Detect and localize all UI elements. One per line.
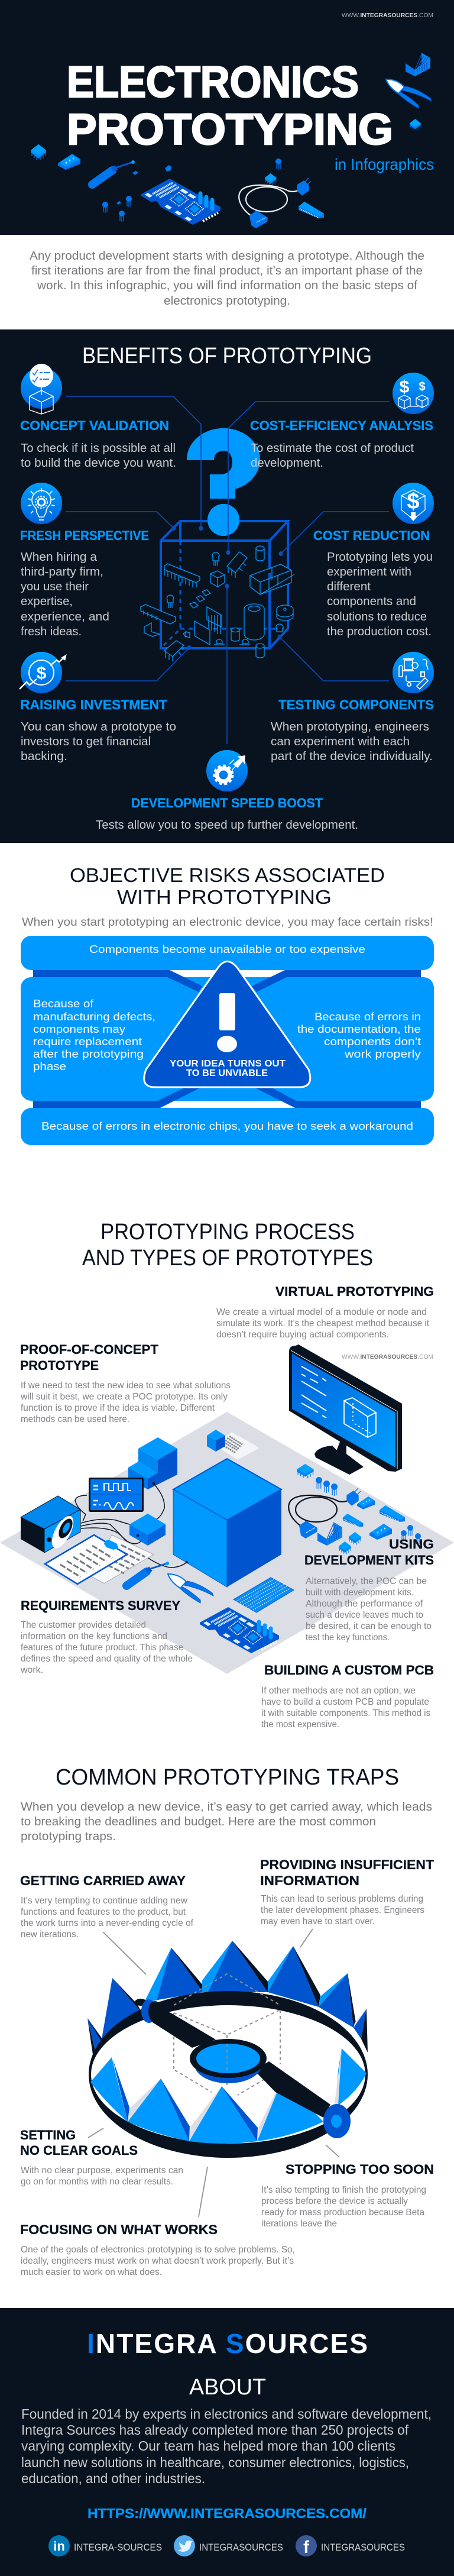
type: using development kits: test the key functions.: [306, 1633, 390, 1643]
text: fresh perspective: you use their: [21, 580, 89, 593]
type: using development kits: DEVELOPMENT KITS: [304, 1553, 434, 1567]
trap: stopping too soon: process before the device is actually: [261, 2196, 408, 2206]
type: requirements survey: [20, 1598, 193, 1675]
text: concept validation: To check if it is possible at all: [21, 442, 176, 455]
trap: getting carried away: GETTING CARRIED AWAY: [20, 1873, 186, 1888]
text: cost-efficiency analysis: development.: [251, 457, 323, 470]
social: linkedin: INTEGRA-SOURCES: [74, 2542, 162, 2553]
website link: HTTPS://WWW.INTEGRASOURCES.COM/: [87, 2506, 367, 2521]
type: proof-of-concept prototype: PROTOTYPE: [20, 1358, 99, 1373]
text: fresh perspective: fresh ideas.: [21, 625, 82, 638]
type: using development kits: Alternatively, the POC can be: [306, 1576, 427, 1586]
website label: WWW.INTEGRASOURCES.COM: [342, 12, 433, 19]
benefit: raising investment: [20, 652, 176, 763]
risk: manufacturing defects: manufacturing defects,: [33, 1011, 155, 1023]
text: fresh perspective: expertise,: [21, 595, 73, 608]
type: building a custom pcb: have to build a custom PCB and populate: [261, 1697, 429, 1707]
illustration: central cube: [173, 1459, 281, 1587]
about text: Integra Sources has already completed more than 250 projects of: [21, 2422, 409, 2438]
risk: documentation: work properly: [344, 1048, 421, 1060]
back spikes: [87, 1941, 368, 2058]
trap: stopping too soon: iterations leave the: [261, 2219, 337, 2229]
front spikes: [90, 2048, 367, 2144]
illustration: bear trap: [87, 1941, 368, 2158]
trap: providing insufficient information: [260, 1857, 434, 1927]
text: fresh perspective: When hiring a: [21, 551, 98, 564]
type: proof-of-concept prototype: methods can be used here.: [21, 1414, 129, 1424]
trap: getting carried away: the work turns into a never-ending cycle of: [21, 1918, 194, 1928]
text: testing components: [271, 720, 433, 763]
risk: manufacturing defects: phase: [33, 1061, 66, 1072]
panel: footer: [0, 2308, 454, 2576]
type: requirements survey: REQUIREMENTS SURVEY: [21, 1598, 180, 1613]
social: linkedin: [48, 2535, 162, 2556]
illustration: development kit components: [288, 1464, 421, 1554]
risk: manufacturing defects: [33, 998, 155, 1072]
trap: stopping too soon: ready for mass production because Beta: [261, 2207, 424, 2218]
icon: cost reduction: [393, 483, 434, 524]
type: using development kits: be desired, it can be enough to: [306, 1621, 432, 1631]
text: cost reduction: experiment with: [327, 565, 411, 578]
risk: manufacturing defects: require replacement: [33, 1036, 142, 1048]
intro text: first iterations are far from the final product, it’s an important phase of the: [31, 264, 423, 277]
type: building a custom pcb: it with suitable components. This method is: [261, 1708, 430, 1718]
heading: process: [82, 1220, 373, 1271]
trap: focusing on what works: One of the goals of electronics prototyping is to solve problems. So,: [21, 2245, 295, 2255]
type: using development kits: USING: [389, 1537, 434, 1552]
text: testing components: can experiment with each: [271, 735, 410, 748]
type: building a custom pcb: If other methods are not an option, we: [261, 1686, 416, 1696]
text: raising investment: [21, 720, 176, 763]
illustration: pliers: [168, 1574, 213, 1603]
title: PROTOTYPING: [67, 105, 393, 154]
trap: providing insufficient information: may even have to start over.: [261, 1916, 375, 1927]
about text: Founded in 2014 by experts in electronics and software development,: [21, 2406, 432, 2422]
icon: screwdriver: [92, 160, 135, 185]
traps intro: prototyping traps.: [21, 1830, 116, 1843]
icon: transistors: [102, 159, 281, 222]
icon: speed boost: [206, 750, 248, 791]
icon: cost-efficiency: $: [400, 377, 410, 397]
text: cost reduction: different: [327, 580, 371, 593]
trap: stopping too soon: It’s also tempting to finish the prototyping: [261, 2185, 426, 2195]
social: facebook: f: [303, 2538, 310, 2557]
icon: long chip: [299, 202, 324, 218]
title: ELECTRONICS: [67, 57, 359, 106]
box outline: [161, 521, 288, 648]
warning text: [170, 1059, 286, 1078]
type: proof-of-concept prototype: If we need to test the new idea to see what solutions: [21, 1381, 231, 1391]
question mark: [187, 428, 260, 536]
social: twitter: [174, 2535, 283, 2556]
icon: cost-efficiency: $: [419, 380, 426, 393]
trap: stopping too soon: [261, 2162, 434, 2229]
traps intro: When you develop a new device, it’s easy to get carried away, which leads: [21, 1801, 432, 1814]
connector dots: [171, 526, 283, 650]
connector lines: [66, 396, 389, 744]
risk: manufacturing defects: after the prototyping: [33, 1048, 144, 1060]
trap: providing insufficient information: PROVIDING INSUFFICIENT: [260, 1857, 434, 1872]
heading: risks: WITH PROTOTYPING: [117, 886, 332, 908]
type: proof-of-concept prototype: will suit it best, we create a POC prototype. Its only: [20, 1392, 228, 1402]
icon: raising investment: $: [37, 664, 47, 683]
heading: process: AND TYPES OF PROTOTYPES: [82, 1246, 373, 1271]
text: raising investment: backing.: [21, 750, 67, 763]
social: twitter: INTEGRASOURCES: [199, 2542, 283, 2553]
floor diamond: [0, 1412, 454, 1674]
heading: risks: OBJECTIVE RISKS ASSOCIATED: [70, 864, 385, 886]
about text: education, and other industries.: [21, 2471, 205, 2486]
trap: setting no clear goals: With no clear purpose, experiments can: [21, 2165, 183, 2176]
type: virtual prototyping: simulate its work. It’s the cheapest method because it: [216, 1318, 430, 1329]
type: requirements survey: defines the speed and quality of the whole: [21, 1654, 193, 1664]
trap: focusing on what works: much easier to work on what does.: [21, 2267, 162, 2277]
icon: raising investment: [20, 652, 66, 693]
trap: setting no clear goals: go on for months with no clear results.: [21, 2177, 173, 2187]
text: cost reduction: the production cost.: [327, 625, 432, 638]
icon: small chip left: [31, 144, 46, 160]
pivots: [135, 1999, 351, 2138]
logo: INTEGRA SOURCES: [87, 2328, 368, 2359]
risk: components: Components become unavailable or too expensive: [89, 943, 365, 955]
text: concept validation: to build the device you want.: [21, 457, 176, 470]
risk: documentation: the documentation, the: [297, 1023, 421, 1035]
text: testing components: When prototyping, engineers: [271, 720, 429, 733]
leader lines: [88, 1929, 339, 2217]
icon: relay: [58, 154, 80, 170]
trap: stopping too soon: STOPPING TOO SOON: [286, 2162, 434, 2177]
illustration: cable: [239, 178, 311, 228]
icon: heat sink: [406, 53, 430, 76]
illustration: monitor: [289, 1344, 433, 1475]
icon: cost reduction: $: [407, 489, 420, 514]
type: virtual prototyping: doesn’t require buying actual components.: [216, 1330, 389, 1340]
heading: testing components: TESTING COMPONENTS: [278, 697, 434, 712]
text: concept validation: [21, 442, 176, 470]
title: [67, 57, 393, 154]
heading: concept validation: CONCEPT VALIDATION: [20, 418, 169, 433]
panel: header: [0, 0, 454, 235]
text: raising investment: investors to get financial: [21, 735, 151, 748]
illustration: stacked blocks: [128, 1437, 177, 1489]
benefit: cost-efficiency analysis: [250, 373, 434, 470]
heading: about: ABOUT: [189, 2375, 266, 2400]
panel: benefits: [0, 329, 454, 843]
trap: providing insufficient information: INFORMATION: [260, 1873, 359, 1888]
dashed guides: [174, 1974, 280, 2095]
trap: getting carried away: [20, 1873, 194, 1940]
intro text: electronics prototyping.: [164, 295, 290, 308]
trap: focusing on what works: ideally, engineers must work on what doesn’t work properly. But it’s: [21, 2256, 294, 2266]
benefit: development speed boost: [96, 750, 358, 832]
type: using development kits: Although the performance of: [306, 1599, 423, 1609]
type: building a custom pcb: [261, 1663, 434, 1730]
risk: manufacturing defects: Because of: [33, 998, 94, 1010]
text: fresh perspective: third-party firm,: [21, 565, 103, 578]
icon: cost-efficiency: [393, 373, 434, 414]
heading: risks: [70, 864, 385, 908]
text: raising investment: You can show a prototype to: [21, 720, 176, 733]
risk cards: [21, 936, 434, 1145]
text: cost reduction: Prototyping lets you: [327, 551, 433, 564]
trap: setting no clear goals: SETTING: [20, 2128, 76, 2142]
heading: benefits: BENEFITS OF PROTOTYPING: [82, 344, 372, 369]
type: using development kits: [304, 1537, 434, 1643]
text: development speed boost: Tests allow you to speed up further development.: [96, 819, 358, 832]
icon: small chip right: [410, 119, 421, 130]
type: virtual prototyping: [216, 1284, 434, 1340]
illustration: oscilloscope: [89, 1478, 144, 1512]
about text: [21, 2406, 432, 2486]
trap: setting no clear goals: NO CLEAR GOALS: [20, 2143, 138, 2158]
type: virtual prototyping: We create a virtual model of a module or node and: [216, 1307, 427, 1317]
text: cost reduction: [327, 551, 433, 638]
text: cost reduction: components and: [327, 595, 416, 608]
risk: electronic chips: Because of errors in electronic chips, you have to seek a workaround: [41, 1120, 413, 1132]
benefit: cost reduction: [313, 483, 434, 638]
type: using development kits: such a device leaves much to: [306, 1610, 423, 1620]
trap: focusing on what works: [20, 2222, 295, 2277]
traps intro: to breaking the deadlines and budget. Here are the most common: [21, 1815, 376, 1828]
social: facebook: INTEGRASOURCES: [321, 2542, 405, 2553]
trap: providing insufficient information: This can lead to serious problems during: [261, 1894, 423, 1904]
illustration: speaker: [21, 1496, 80, 1553]
heading: traps: COMMON PROTOTYPING TRAPS: [56, 1765, 399, 1790]
type: requirements survey: work.: [20, 1665, 43, 1675]
warning text: TO BE UNVIABLE: [186, 1068, 268, 1078]
panel: process: [0, 1220, 454, 1730]
text: fresh perspective: [21, 551, 109, 638]
type: requirements survey: The customer provides detailed: [21, 1620, 146, 1630]
text: cost-efficiency analysis: To estimate the cost of product: [251, 442, 414, 455]
panel: risks: [21, 864, 434, 1145]
illustration: circuit board: [141, 179, 220, 225]
traps intro: [21, 1801, 432, 1843]
type: proof-of-concept prototype: function is to prove if the idea is viable. Different: [21, 1403, 215, 1413]
type: proof-of-concept prototype: [20, 1342, 231, 1424]
icon: light bulb: [21, 483, 62, 524]
illustration: screwdriver: [127, 1562, 169, 1586]
icon: pliers: [386, 79, 432, 108]
benefit: testing components: [271, 652, 434, 763]
panel: traps: [20, 1765, 434, 2277]
intro text: work. In this infographic, you will find information on the basic steps of: [37, 279, 417, 292]
trap: providing insufficient information: the later development phases. Engineers: [261, 1905, 424, 1915]
benefit: fresh perspective: [20, 483, 149, 638]
heading: cost-efficiency analysis: COST-EFFICIENCY ANALYSIS: [250, 418, 433, 433]
icon: testing components: [393, 652, 434, 693]
icon: chip center: [265, 173, 277, 185]
illustration: breadboard: [234, 1578, 294, 1612]
warning triangle: [144, 962, 310, 1087]
trap: setting no clear goals: [20, 2128, 183, 2187]
intro text: Any product development starts with designing a prototype. Although the: [30, 250, 424, 263]
social: facebook: [296, 2535, 405, 2557]
risk: manufacturing defects: components may: [33, 1023, 125, 1035]
trap: focusing on what works: FOCUSING ON WHAT WORKS: [20, 2222, 218, 2237]
benefit: concept validation: [20, 364, 176, 470]
warning text: YOUR IDEA TURNS OUT: [170, 1059, 286, 1069]
text: cost-efficiency analysis: [251, 442, 414, 470]
type: building a custom pcb: the most expensive.: [261, 1720, 339, 1730]
type: building a custom pcb: BUILDING A CUSTOM PCB: [264, 1663, 434, 1678]
illustration: small cube: [129, 1482, 188, 1563]
heading: raising investment: RAISING INVESTMENT: [20, 697, 168, 712]
type: using development kits: built with development kits.: [306, 1588, 414, 1598]
illustration: clipboard: [45, 1535, 154, 1584]
heading: process: PROTOTYPING PROCESS: [100, 1220, 355, 1245]
trap arms and hub: [151, 2005, 330, 2118]
heading: development speed boost: DEVELOPMENT SPEED BOOST: [131, 796, 323, 810]
line-art components inside box: [141, 546, 294, 661]
illustration: circuit board: [200, 1607, 279, 1653]
social: linkedin: in: [53, 2539, 65, 2554]
connectors: [33, 970, 421, 1108]
type: proof-of-concept prototype: PROOF-OF-CONCEPT: [20, 1342, 159, 1357]
text: fresh perspective: experience, and: [21, 610, 109, 623]
risk: documentation: components don’t: [324, 1036, 421, 1048]
intro text: [30, 250, 424, 308]
trap: getting carried away: It’s very tempting to continue adding new: [21, 1896, 187, 1906]
subtitle: in Infographics: [335, 156, 434, 173]
heading: fresh perspective: FRESH PERSPECTIVE: [20, 528, 149, 543]
about text: varying complexity. Our team has helped more than 100 clients: [21, 2438, 395, 2454]
website label: WWW.INTEGRASOURCES.COM: [342, 1353, 433, 1360]
risk: documentation: Because of errors in: [314, 1011, 421, 1023]
trap: getting carried away: functions and features to the product, but: [21, 1907, 186, 1917]
risks intro: When you start prototyping an electronic device, you may face certain risks!: [22, 916, 433, 929]
text: cost reduction: solutions to reduce: [327, 610, 427, 623]
text: testing components: part of the device individually.: [271, 750, 433, 763]
heading: cost reduction: COST REDUCTION: [313, 528, 430, 543]
type: requirements survey: features of the future product. This phase: [21, 1643, 183, 1653]
type: requirements survey: information on the key functions and: [21, 1631, 167, 1641]
trap: getting carried away: new iterations.: [21, 1929, 79, 1940]
about text: launch new solutions in healthcare, consumer electronics, logistics,: [21, 2455, 409, 2470]
icon: concept validation: [21, 364, 62, 414]
illustration: spec sheet and cube: [207, 1430, 260, 1460]
type: virtual prototyping: VIRTUAL PROTOTYPING: [275, 1284, 434, 1299]
illustration: wires: [75, 1482, 187, 1567]
risk: documentation: [297, 1011, 421, 1060]
ring: [89, 1991, 368, 2158]
